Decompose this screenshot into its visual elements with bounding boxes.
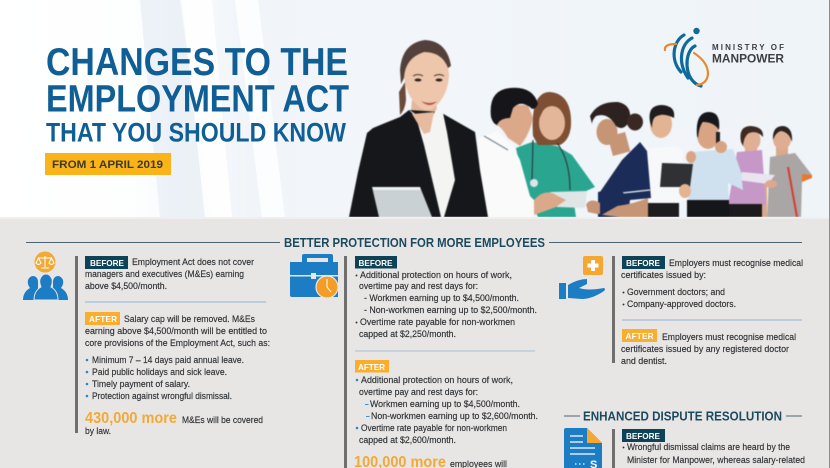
icon: hand with medical cross (559, 256, 605, 299)
text block: after (85, 314, 270, 348)
date badge: FROM 1 APRIL 2019 (52, 159, 163, 171)
text block: before (356, 270, 537, 339)
figure: tablet and hands (534, 191, 600, 215)
badge: after: AFTER (626, 332, 654, 341)
text block: before: certificates issued by: (621, 270, 706, 280)
bullet list (86, 355, 244, 401)
text block: before: - Non-workmen earning up to $2,500/month. (364, 305, 537, 315)
badge: after (355, 360, 389, 372)
icon: people with scales (23, 252, 68, 300)
badge: after (622, 329, 657, 342)
bullet list: Paid public holidays and sick leave. (92, 367, 227, 377)
text block: before: Wrongful dismissal claims are heard by the (627, 442, 790, 452)
callout: 430,000 more (85, 410, 263, 436)
text block: before (623, 442, 805, 465)
text block: before: Overtime rate payable for non-workmen (360, 317, 515, 327)
text block: before: Additional protection on hours of work, (360, 270, 512, 280)
date badge (45, 153, 171, 175)
text block: after: Employers must recognise medical (662, 332, 796, 342)
text block: after: Salary cap will be removed. M&Es (124, 314, 255, 324)
figure: man on phone (686, 112, 743, 217)
text block: after: Additional protection on hours of work, (361, 375, 513, 385)
logo: Ministry of Manpower (665, 28, 785, 86)
figure: man with tablet (644, 105, 693, 217)
icon: document with dollar sign (564, 428, 602, 468)
text block: before: Government doctors; and (627, 287, 725, 297)
badge: before (622, 429, 665, 442)
callout: 430,000 more: M&Es will be covered (182, 415, 263, 425)
text block: before: - Workmen earning up to $4,500/month. (364, 293, 519, 303)
badge: before (622, 256, 665, 269)
badge: after: AFTER (358, 363, 385, 372)
figure: nurse (586, 102, 651, 217)
title: THAT YOU SHOULD KNOW (46, 118, 346, 148)
badge: before: BEFORE (358, 259, 393, 268)
callout: 430,000 more: by law. (85, 426, 111, 436)
text block: before: Employers must recognise medical (669, 258, 803, 268)
figure: businesswoman (349, 40, 488, 217)
text block: after (621, 332, 796, 366)
figure: older woman (728, 126, 777, 217)
text block: after: core provisions of the Employment Act, such as: (85, 338, 270, 348)
text block: after: Workmen earning up to $4,500/month. (370, 399, 520, 409)
text block: before: overtime pay and rest days for: (359, 281, 478, 291)
text block: after: Overtime rate payable for non-workmen (361, 423, 507, 433)
title (46, 41, 349, 148)
panel: dispute resolution (564, 428, 805, 468)
badge: after (85, 312, 120, 325)
figure: cleaner (761, 126, 812, 217)
text block: before: managers and executives (M&Es) earning (85, 269, 244, 279)
title: EMPLOYMENT ACT (46, 78, 349, 120)
title: CHANGES TO THE (46, 41, 348, 84)
callout: 430,000 more: 430,000 more (85, 410, 177, 427)
photo: group of workers (349, 40, 812, 217)
callout: 100,000 more (354, 454, 507, 468)
bullet list: Protection against wrongful dismissal. (92, 391, 232, 401)
heading: better protection: BETTER PROTECTION FOR MORE EMPLOYEES (284, 235, 545, 250)
logo: Ministry of Manpower: MANPOWER (712, 54, 785, 66)
panel: managers and executives (23, 252, 270, 436)
panel: hours of work (290, 254, 538, 468)
text block: after: certificates issued by any registered doctor (621, 344, 789, 354)
text block: after (356, 375, 538, 445)
text block: before (85, 257, 254, 291)
figure: woman in green scrubs (516, 92, 595, 217)
text block: before: above $4,500/month. (85, 281, 167, 291)
badge: before (85, 256, 128, 269)
text block: before: capped at $2,250/month. (359, 329, 456, 339)
text block: before: Employment Act does not cover (132, 257, 254, 267)
badge: before (355, 256, 397, 268)
badge: before: BEFORE (626, 259, 661, 268)
bullet list: Timely payment of salary. (92, 379, 190, 389)
logo: Ministry of Manpower: MINISTRY OF (712, 43, 784, 52)
text block: before: Company-approved doctors. (627, 299, 736, 309)
icon: briefcase with clock (290, 254, 338, 298)
bullet list: Minimum 7 – 14 days paid annual leave. (92, 355, 244, 365)
text block: after: overtime pay and rest days for: (359, 387, 478, 397)
text block: after: and dentist. (621, 356, 667, 366)
text block: after: capped at $2,600/month. (359, 435, 456, 445)
heading: enhanced dispute resolution: ENHANCED DISPUTE RESOLUTION (583, 408, 782, 424)
text block: after: Non-workmen earning up to $2,600/month. (371, 411, 538, 421)
text block: after: earning above $4,500/month will be entitled to (85, 326, 267, 336)
badge: after: AFTER (89, 315, 117, 324)
panel: medical certificates (559, 256, 803, 366)
text block: before (621, 258, 803, 309)
figure: doctor (478, 88, 538, 217)
badge: before: BEFORE (626, 432, 661, 441)
panel: lower content background (0, 217, 829, 468)
badge: before: BEFORE (90, 259, 125, 268)
text block: before: Minister for Manpower, whereas salary-related (627, 455, 805, 465)
